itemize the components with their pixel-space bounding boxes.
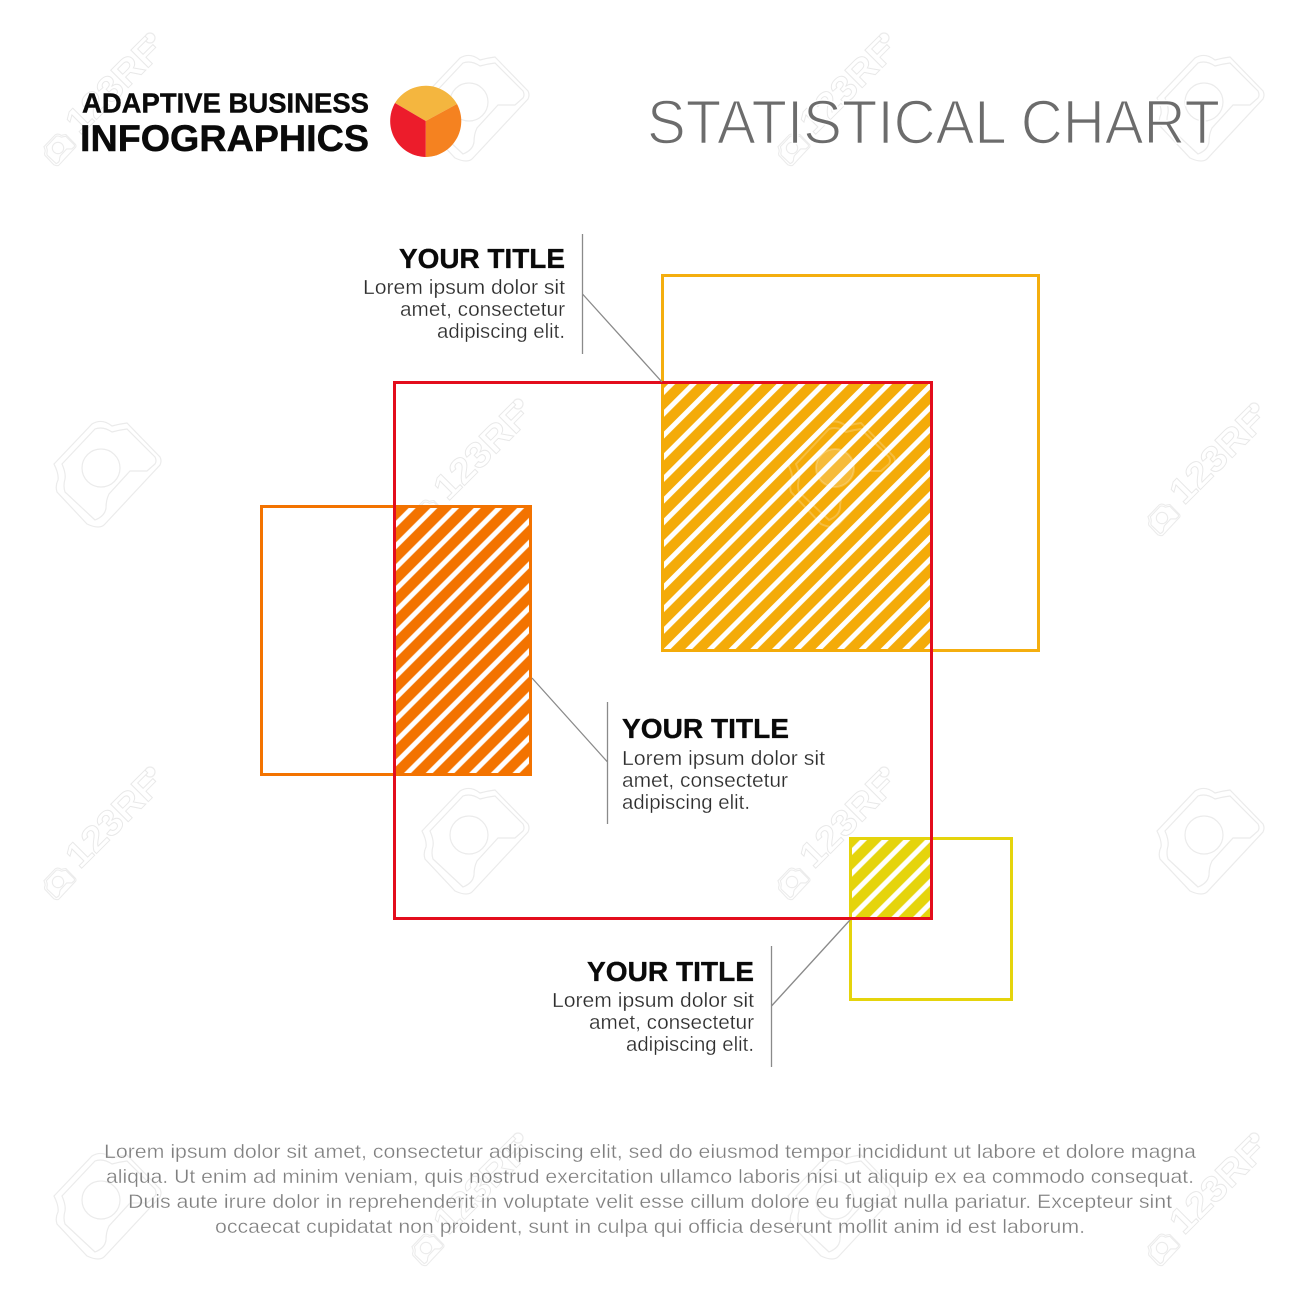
callout: bottom: YOUR TITLE	[587, 956, 754, 987]
callout: middle	[532, 678, 825, 824]
footer text block: Lorem ipsum dolor sit amet, consectetur adipiscing elit, sed do eiusmod tempor incididunt ut labore et dolore magna	[104, 1141, 1196, 1163]
callout: bottom: adipiscing elit.	[626, 1034, 754, 1056]
callout: middle: adipiscing elit.	[622, 792, 750, 814]
watermark: 123RF	[1161, 1129, 1273, 1242]
watermark: 123RF	[57, 763, 169, 876]
watermark: 123RF	[425, 1129, 537, 1242]
watermark: 123RF	[425, 395, 537, 508]
callout: bottom: Lorem ipsum dolor sit	[552, 990, 754, 1012]
watermark: 123RF	[791, 29, 903, 142]
red main square outline	[394, 382, 932, 918]
callout: bottom	[552, 920, 850, 1067]
callout: top: amet, consectetur	[400, 299, 565, 321]
brand heading: INFOGRAPHICS	[80, 118, 369, 159]
brand heading: ADAPTIVE BUSINESS	[82, 88, 369, 118]
footer text block: occaecat cupidatat non proident, sunt in culpa qui officia deserunt mollit anim id est laborum.	[215, 1216, 1085, 1238]
callout: middle: YOUR TITLE	[622, 713, 789, 744]
callout: top	[363, 234, 662, 382]
footer text block	[104, 1141, 1196, 1238]
footer text block: Duis aute irure dolor in reprehenderit in voluptate velit esse cillum dolore eu fugiat nulla pariatur. Excepteur sint	[128, 1191, 1173, 1213]
brand heading	[80, 88, 369, 159]
callout: top: YOUR TITLE	[399, 243, 565, 274]
watermark: 123RF	[791, 763, 903, 876]
callout: top: Lorem ipsum dolor sit	[363, 277, 565, 299]
watermark: 123RF	[57, 29, 169, 142]
icon: pie chart logo	[390, 86, 461, 157]
title: STATISTICAL CHART	[647, 88, 1220, 158]
footer text block: aliqua. Ut enim ad minim veniam, quis nostrud exercitation ullamco laboris nisi ut aliquip ex ea commodo consequat.	[106, 1166, 1194, 1188]
callout: top: adipiscing elit.	[437, 321, 565, 343]
yellow square outline	[850, 838, 1012, 1000]
yellow striped overlap	[850, 838, 932, 918]
gold square outline	[662, 276, 1038, 650]
watermark: 123RF	[1161, 399, 1273, 512]
orange striped overlap	[394, 506, 530, 774]
callout: middle: amet, consectetur	[622, 770, 788, 792]
orange rectangle outline	[262, 506, 530, 774]
callout: bottom: amet, consectetur	[589, 1012, 754, 1034]
chart: overlapping squares	[262, 276, 1038, 1000]
watermark over gold area	[788, 421, 895, 527]
callout: middle: Lorem ipsum dolor sit	[622, 748, 825, 770]
gold striped overlap	[662, 382, 932, 650]
